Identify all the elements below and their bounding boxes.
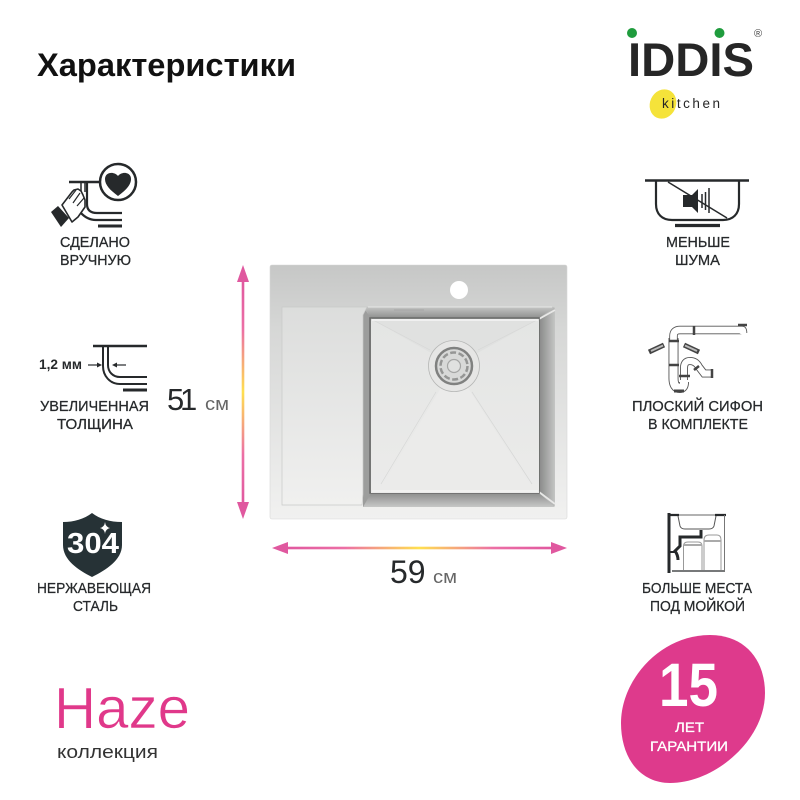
bowl walls xyxy=(363,307,555,507)
label: handmade xyxy=(60,235,131,269)
label: more space: ПОД МОЙКОЙ xyxy=(650,597,745,615)
warranty badge: 15 xyxy=(659,651,718,719)
dimension: 51 cm xyxy=(167,382,229,417)
icon: thickness: 1,2 мм xyxy=(39,357,82,372)
dimension: 51 cm: см xyxy=(205,394,229,414)
tap hole xyxy=(450,281,468,299)
label: stainless steel: СТАЛЬ xyxy=(73,599,118,615)
logo: IDDIS kitchen: kitchen xyxy=(662,96,720,111)
logo: IDDIS kitchen: ® xyxy=(754,28,762,40)
overflow marks xyxy=(394,309,424,311)
logo: IDDIS kitchen: IDDIS xyxy=(628,33,754,86)
warranty badge: ЛЕТ xyxy=(675,719,704,735)
dimension: 59 cm: 59 xyxy=(390,554,426,590)
warranty badge: ГАРАНТИИ xyxy=(650,738,728,754)
warranty badge xyxy=(621,635,765,783)
dimension: 59 cm xyxy=(390,554,457,590)
icon: handmade xyxy=(51,164,136,227)
label: thickness xyxy=(40,399,149,433)
label: handmade: ВРУЧНУЮ xyxy=(60,253,131,269)
logo: IDDIS kitchen xyxy=(627,28,762,123)
dimension: 59 cm: см xyxy=(433,567,457,587)
icon: more space under sink xyxy=(669,513,726,573)
bowl floor xyxy=(371,319,539,493)
icon: 304 shield: 304 xyxy=(67,528,119,560)
label: less noise: МЕНЬШЕ xyxy=(666,235,730,251)
label: thickness: ТОЛЩИНА xyxy=(57,417,133,433)
label: thickness: УВЕЛИЧЕННАЯ xyxy=(40,399,149,415)
icon: thickness xyxy=(39,346,147,390)
label: less noise xyxy=(666,235,730,269)
dimension arrow: height xyxy=(237,265,249,519)
label: stainless steel xyxy=(37,581,151,615)
sink illustration xyxy=(270,265,567,519)
drainboard xyxy=(282,307,367,505)
collection name: Haze xyxy=(54,676,190,741)
label: flat siphon: В КОМПЛЕКТЕ xyxy=(648,417,748,433)
drain xyxy=(428,340,480,392)
label: more space: БОЛЬШЕ МЕСТА xyxy=(642,581,752,597)
sink top plate xyxy=(270,265,567,519)
label: flat siphon xyxy=(632,397,763,433)
icon: less noise xyxy=(645,180,749,226)
label: handmade: СДЕЛАНО xyxy=(60,235,130,251)
label: more space xyxy=(642,581,752,615)
dimension: 51 cm: 5 xyxy=(167,382,184,417)
label: flat siphon: ПЛОСКИЙ СИФОН xyxy=(632,397,763,415)
label: less noise: ШУМА xyxy=(675,253,720,269)
icon: 304 shield xyxy=(63,513,122,577)
dimension: 51 cm: 1 xyxy=(180,382,197,417)
dimension arrow: width xyxy=(272,542,567,554)
collection name: коллекция xyxy=(57,742,158,762)
title: Характеристики xyxy=(37,47,296,83)
label: stainless steel: НЕРЖАВЕЮЩАЯ xyxy=(37,581,151,597)
icon: flat siphon xyxy=(649,325,747,391)
